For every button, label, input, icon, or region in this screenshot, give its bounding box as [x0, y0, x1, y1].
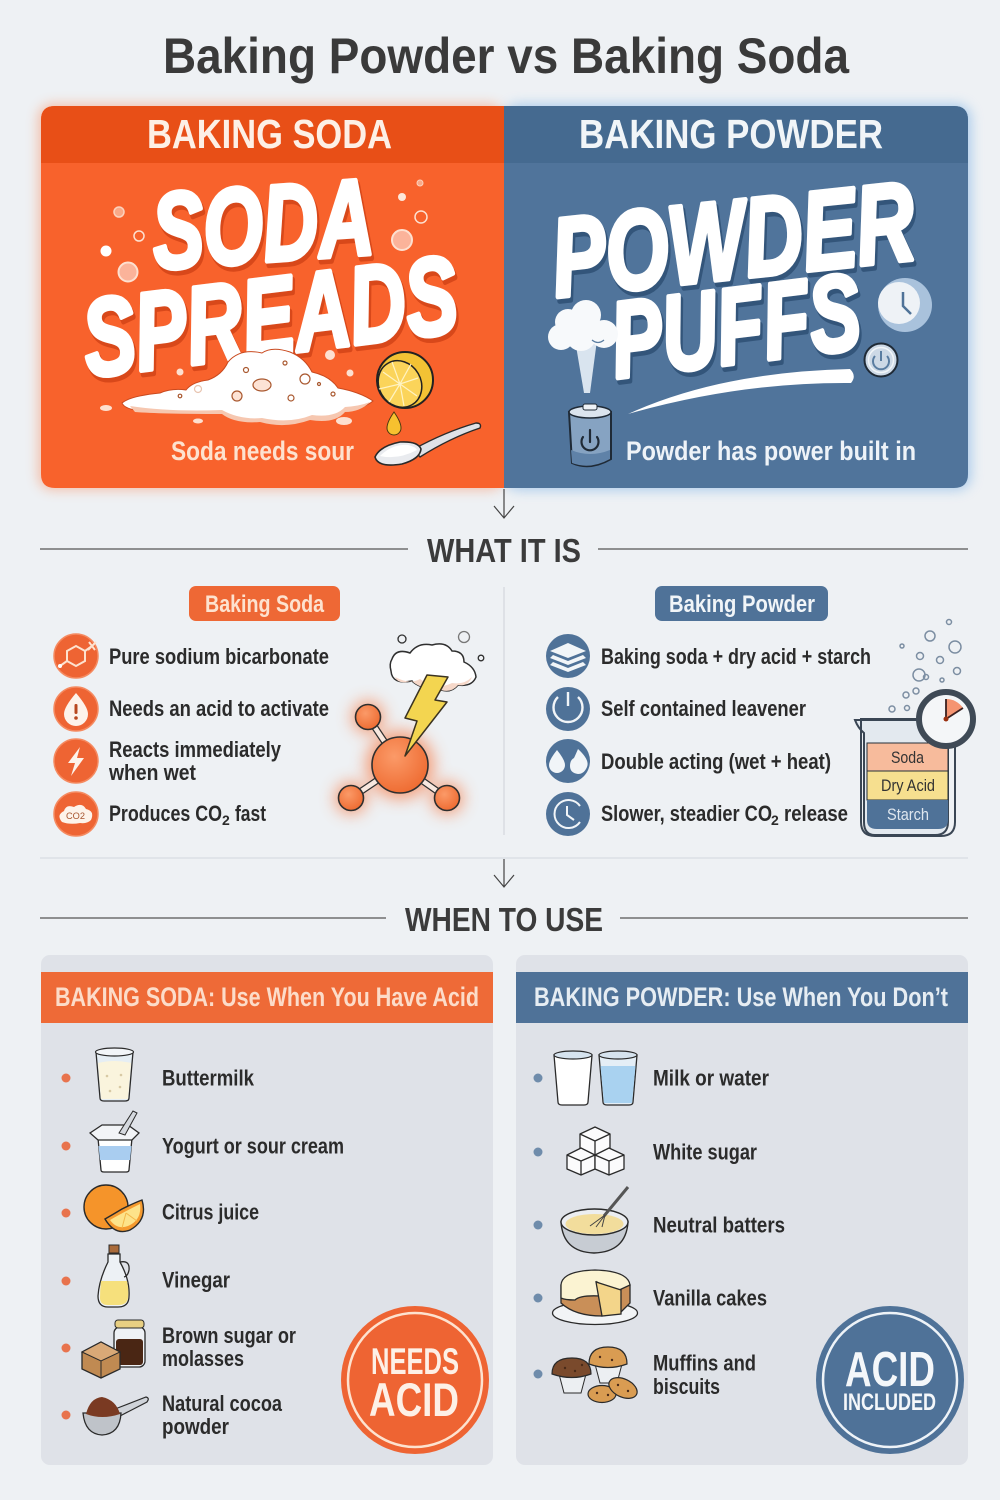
icon: spreading foam: [100, 349, 373, 425]
text: cocoa: Natural cocoa: [162, 1391, 282, 1416]
heading: baking soda: BAKING SODA: [147, 111, 392, 157]
arrow: to what it is: [494, 489, 514, 518]
text: white sugar: White sugar: [653, 1140, 757, 1164]
slogan: soda spreads: SPREADS: [76, 233, 464, 401]
tagline: soda needs sour: Soda needs sour: [171, 436, 354, 466]
text: vanilla cakes: Vanilla cakes: [653, 1286, 767, 1310]
text: produces co2: fast: [235, 801, 266, 826]
slogan: powder puffs: [545, 158, 923, 414]
text: reacts immediately: [108, 737, 281, 785]
text: needs acid: Needs an acid to activate: [109, 696, 329, 721]
panel: baking soda facts: [54, 586, 484, 836]
text: slower steadier: Slower, steadier CO: [601, 801, 772, 826]
text: yogurt: Yogurt or sour cream: [162, 1134, 344, 1158]
slogan: soda spreads: SPREADS: [78, 237, 466, 405]
icon: vinegar: [98, 1245, 129, 1307]
slogan: soda spreads: SODA: [150, 160, 379, 296]
panel: baking powder hero: [504, 106, 968, 488]
icon: sugar cubes: [567, 1127, 624, 1175]
header: use when you have acid: BAKING SODA: Use When You Have Acid: [55, 982, 479, 1012]
icon: battery: [569, 404, 611, 466]
title: Baking Powder vs Baking Soda: [163, 28, 850, 84]
text: muffins: Muffins and: [653, 1350, 756, 1376]
icon: beaker with layers and timer: Dry Acid: [881, 776, 935, 795]
icon: molecule: [54, 634, 98, 678]
text: produces co2: 2: [222, 812, 230, 828]
label pill: baking soda: [189, 586, 340, 621]
icon: brown sugar and molasses: [82, 1320, 145, 1378]
icon: vanilla cake: [552, 1270, 638, 1324]
text: slower steadier: 2: [771, 812, 779, 828]
icon: faint clock: [878, 278, 932, 332]
icon: co2 cloud: [54, 792, 98, 836]
badge: needs acid: ACID: [369, 1373, 459, 1426]
icon: drop and flame: [546, 739, 590, 783]
slogan: powder puffs: PUFFS: [604, 250, 867, 401]
header: use when you don't: [516, 972, 968, 1023]
slogan: soda spreads: [76, 156, 466, 405]
panel: baking powder uses: [516, 955, 968, 1465]
icon: clock: [546, 792, 590, 836]
icon: power: [546, 687, 590, 731]
badge: acid included: [816, 1306, 964, 1454]
label pill: baking powder: [655, 586, 828, 621]
icon: muffins and biscuits: [552, 1347, 640, 1402]
icon: milk and water: [554, 1051, 637, 1105]
badge: needs acid: [341, 1306, 489, 1454]
icon: cocoa scoop: [83, 1397, 148, 1435]
icon: layers: [546, 634, 590, 678]
heading: what it is: WHAT IT IS: [427, 532, 581, 569]
text: double acting: Double acting (wet + heat): [601, 749, 831, 774]
icon: reacting molecule with bolt: [335, 632, 484, 814]
text: milk or water: Milk or water: [653, 1066, 769, 1090]
icon: citrus: [84, 1185, 144, 1232]
text: buttermilk: Buttermilk: [162, 1066, 254, 1090]
icon: spoon of soda: [375, 423, 480, 465]
icon: acid drop: [54, 687, 98, 731]
heading: baking powder: BAKING POWDER: [579, 111, 883, 157]
icon: power badge: [864, 344, 898, 376]
panel: baking soda uses: [41, 955, 493, 1465]
text: pure sodium bicarbonate: Pure sodium bicarbonate: [109, 644, 329, 669]
icon: beaker with layers and timer: [855, 620, 973, 836]
text: cocoa: [162, 1391, 282, 1439]
text: produces co2: Produces CO: [109, 801, 222, 826]
text: citrus: Citrus juice: [162, 1200, 259, 1224]
panel: hero comparison: [38, 104, 971, 490]
icon: beaker with layers and timer: Starch: [887, 805, 929, 824]
text: vinegar: Vinegar: [162, 1268, 230, 1292]
icon: lemon and drop: [370, 352, 433, 435]
panel: baking powder facts: [546, 586, 973, 836]
badge: acid included: INCLUDED: [843, 1389, 936, 1416]
text: baking soda dry acid starch: Baking soda + dry acid + starch: [601, 644, 871, 669]
text: reacts immediately: Reacts immediately: [109, 737, 281, 762]
text: slower steadier: release: [784, 801, 848, 826]
text: brown sugar: molasses: [162, 1346, 244, 1371]
icon: mixing bowl: [561, 1187, 628, 1253]
icon: bolt: [54, 739, 98, 783]
icon: co2 cloud: CO2: [66, 811, 85, 821]
text: muffins: [653, 1350, 756, 1399]
tagline: powder power: Powder has power built in: [626, 436, 916, 466]
icon: puff cloud: [548, 300, 618, 393]
icon: fizz bubbles: [100, 180, 427, 282]
slogan: soda spreads: SODA: [148, 156, 377, 292]
text: muffins: biscuits: [653, 1374, 720, 1399]
label pill: baking powder: Baking Powder: [669, 591, 815, 618]
badge: acid included: ACID: [845, 1343, 935, 1397]
label pill: baking soda: Baking Soda: [205, 591, 325, 618]
text: cocoa: powder: [162, 1414, 229, 1439]
header: use when you have acid: [41, 972, 493, 1023]
panel: baking soda hero: [41, 106, 504, 488]
arrow: to when to use: [494, 859, 514, 887]
text: brown sugar: Brown sugar or: [162, 1323, 296, 1348]
text: reacts immediately: when wet: [108, 760, 196, 785]
badge: needs acid: NEEDS: [371, 1341, 459, 1382]
icon: yogurt: [90, 1111, 139, 1172]
text: brown sugar: [162, 1323, 296, 1371]
heading: when to use: WHEN TO USE: [405, 901, 603, 938]
icon: buttermilk: [96, 1048, 134, 1101]
icon: beaker with layers and timer: Soda: [891, 748, 924, 767]
text: neutral batters: Neutral batters: [653, 1212, 785, 1238]
text: self contained: Self contained leavener: [601, 696, 806, 721]
slogan: powder puffs: PUFFS: [606, 254, 869, 405]
